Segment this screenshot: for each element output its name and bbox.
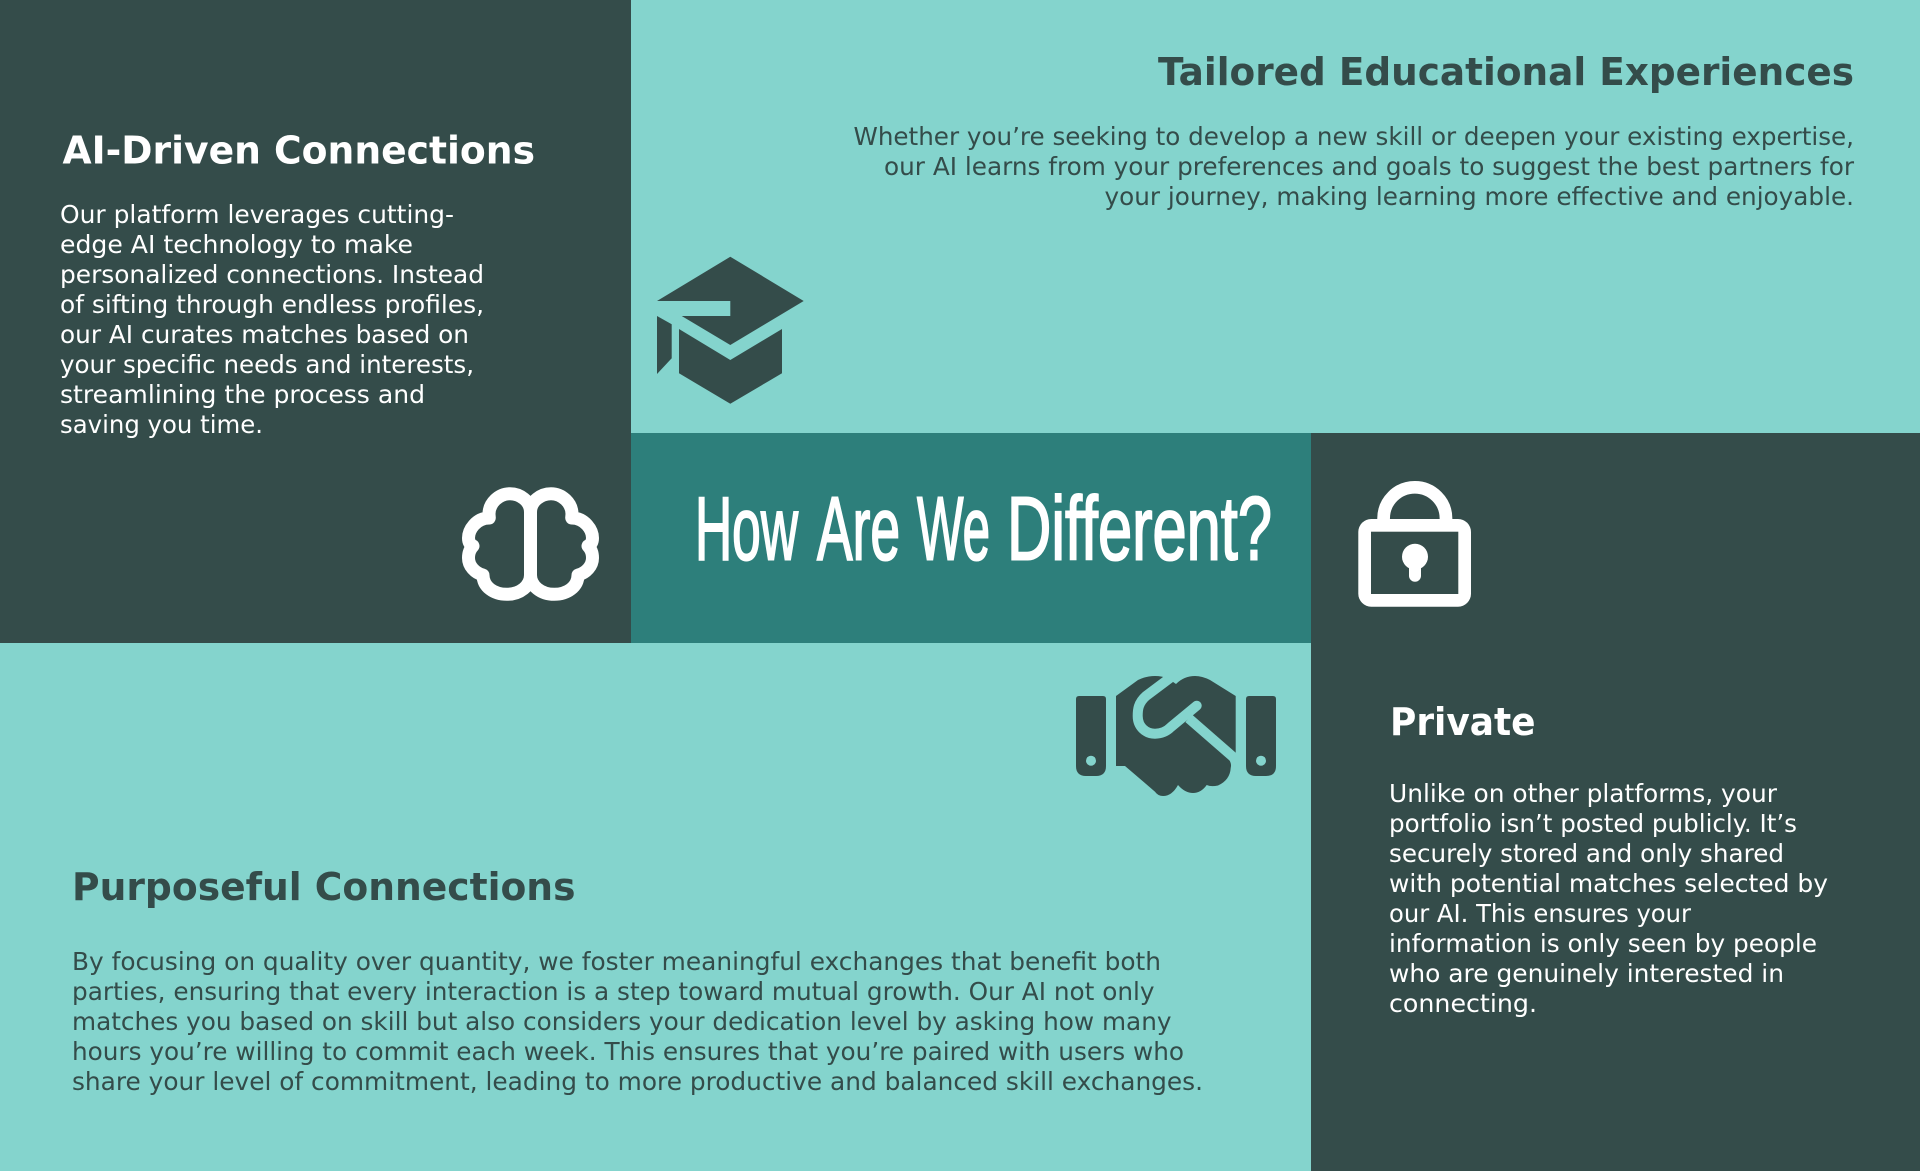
text block: Tailored Educational Experiences description: your journey, making learning more effective and enjoyable.	[1104, 182, 1854, 211]
panel: Tailored Educational Experiences	[631, 0, 1920, 433]
text block: Tailored Educational Experiences description: our AI learns from your preferences and goals to suggest the best partners for	[884, 152, 1855, 181]
text block: Purposeful Connections description: By focusing on quality over quantity, we foster meaningful exchanges that benefit both	[72, 947, 1161, 976]
panel: AI-Driven Connections	[0, 0, 631, 643]
text block: Private description: securely stored and only shared	[1389, 839, 1784, 868]
text block: Private description: information is only seen by people	[1389, 929, 1817, 958]
text block: Private description: our AI. This ensures your	[1389, 899, 1692, 928]
icon: padlock	[1358, 487, 1471, 607]
text block: AI-Driven Connections description: of sifting through endless profiles,	[60, 290, 484, 319]
text block: Private description	[1389, 779, 1828, 1018]
text block: Purposeful Connections description	[72, 947, 1203, 1096]
text block: AI-Driven Connections description	[60, 200, 484, 439]
text block: AI-Driven Connections description: saving you time.	[60, 410, 263, 439]
icon: brain	[468, 494, 592, 594]
text block: AI-Driven Connections description: our AI curates matches based on	[60, 320, 469, 349]
text block: Private description: with potential matches selected by	[1389, 869, 1828, 898]
title: We	[917, 480, 990, 580]
text block: Purposeful Connections description: share your level of commitment, leading to more productive and balanced skill exchanges.	[72, 1067, 1203, 1096]
text block: Tailored Educational Experiences description	[854, 122, 1855, 211]
title: How	[695, 480, 799, 580]
text block: Private description: connecting.	[1389, 989, 1537, 1018]
text block: AI-Driven Connections description: edge AI technology to make	[60, 230, 413, 259]
text block: AI-Driven Connections description: streamlining the process and	[60, 380, 425, 409]
panel: Private	[1311, 433, 1920, 1171]
panel: Purposeful Connections	[0, 643, 1311, 1171]
text block: Purposeful Connections description: matches you based on skill but also considers your dedication level by asking how many	[72, 1007, 1172, 1036]
icon: graduation cap	[657, 257, 804, 404]
heading: Tailored Educational Experiences: Tailored Educational Experiences	[1158, 50, 1854, 95]
heading: Private: Private	[1390, 700, 1536, 745]
icon: handshake	[1076, 675, 1276, 796]
panel: title banner	[631, 433, 1311, 643]
text block: AI-Driven Connections description: Our platform leverages cutting-	[60, 200, 454, 229]
text block: AI-Driven Connections description: your specific needs and interests,	[60, 350, 474, 379]
text block: Purposeful Connections description: hours you’re willing to commit each week. This ensures that you’re paired with users who	[72, 1037, 1184, 1066]
text block: Tailored Educational Experiences description: Whether you’re seeking to develop a new skill or deepen your existing expertise,	[854, 122, 1854, 151]
text block: Purposeful Connections description: parties, ensuring that every interaction is a step toward mutual growth. Our AI not only	[72, 977, 1154, 1006]
heading: Purposeful Connections: Purposeful Connections	[72, 865, 576, 910]
title: Different?	[1007, 480, 1272, 580]
title: Are	[817, 480, 900, 580]
text block: Private description: portfolio isn’t posted publicly. It’s	[1389, 809, 1797, 838]
heading: AI-Driven Connections: AI-Driven Connections	[62, 128, 535, 174]
text block: AI-Driven Connections description: personalized connections. Instead	[60, 260, 484, 289]
text block: Private description: Unlike on other platforms, your	[1389, 779, 1778, 808]
text block: Private description: who are genuinely interested in	[1389, 959, 1784, 988]
